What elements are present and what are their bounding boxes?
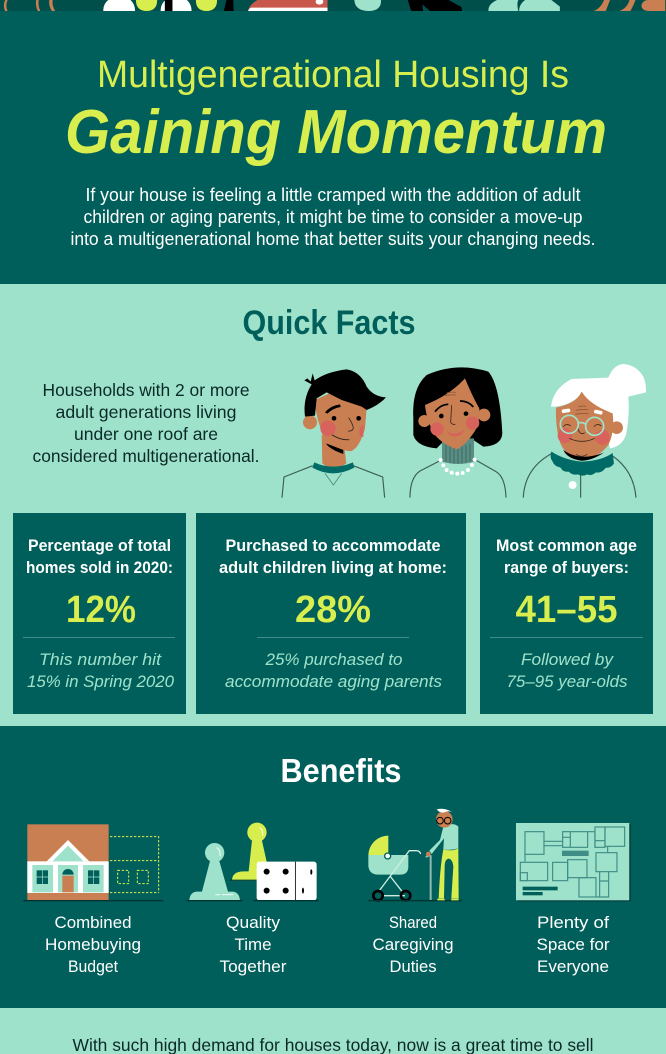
stat card: percentage of homes sold: homes sold in 2020: (26, 559, 173, 577)
stat card: most common age range: 75–95 year-olds (506, 672, 628, 691)
stat card: percentage of homes sold: This number hit (39, 650, 162, 669)
icon: game pieces and domino (187, 823, 319, 901)
stat card: percentage of homes sold (13, 513, 186, 714)
label: Quality (226, 913, 280, 932)
intro paragraph: If your house is feeling a little cramped with the addition of adult (86, 185, 580, 205)
icon: grandfather with stroller (368, 809, 462, 901)
young man (282, 369, 386, 498)
label: Duties (390, 957, 436, 976)
label: Caregiving (372, 935, 454, 954)
stat card: purchased for adult children (196, 513, 466, 714)
label: Budget (68, 957, 118, 976)
definition text: under one roof are (74, 424, 218, 444)
panel: quick facts (0, 284, 666, 726)
definition text (32, 380, 260, 466)
middle-aged woman (410, 367, 506, 498)
panel: closing message (0, 1008, 666, 1054)
definition text: Households with 2 or more (42, 380, 250, 400)
label: Together (220, 957, 287, 976)
title line 2: Gaining Momentum (65, 98, 607, 167)
stat card: most common age range (480, 513, 653, 714)
label: Combined (54, 913, 132, 932)
icon: floor plan (516, 823, 631, 901)
stat card: most common age range: range of buyers: (504, 559, 629, 577)
grandmother (523, 364, 646, 498)
stat card: purchased for adult children: adult children living at home: (219, 559, 447, 577)
benefit: plenty of space (516, 823, 631, 976)
intro paragraph: children or aging parents, it might be time to consider a move-up (84, 207, 582, 227)
intro paragraph: into a multigenerational home that better suits your changing needs. (70, 229, 596, 249)
stat card: most common age range: Most common age (496, 537, 637, 555)
illustration strip: feet along the top edge (0, 0, 666, 11)
benefit: shared caregiving duties (368, 809, 462, 976)
label (45, 913, 141, 976)
stat card: most common age range: Followed by (521, 650, 615, 669)
stat card: purchased for adult children: Purchased to accommodate (226, 537, 440, 555)
icon: house (23, 824, 163, 901)
definition text: adult generations living (56, 402, 236, 422)
header: title and intro (65, 54, 607, 249)
heading: benefits: Benefits (280, 752, 402, 789)
stat card: purchased for adult children: accommodate aging parents (225, 672, 442, 691)
label: Space for (536, 935, 610, 954)
label: Time (234, 935, 272, 954)
label: Shared (389, 913, 437, 932)
label: Everyone (537, 957, 609, 976)
label: Homebuying (45, 935, 141, 954)
definition text: considered multigenerational. (32, 446, 260, 466)
stat card: percentage of homes sold: 12% (66, 589, 136, 631)
label (372, 913, 454, 976)
stat card: most common age range: 41–55 (516, 589, 618, 631)
intro paragraph (70, 185, 596, 249)
label: Plenty of (537, 913, 609, 932)
benefit: combined homebuying budget (23, 824, 163, 976)
stat card: percentage of homes sold: Percentage of total (28, 537, 171, 555)
benefit: quality time together (187, 823, 319, 976)
title line 1: Multigenerational Housing Is (97, 54, 569, 96)
illustration: three generations (282, 364, 646, 498)
heading: quick facts: Quick Facts (242, 304, 416, 342)
panel: benefits (23, 752, 631, 976)
stat card: purchased for adult children: 25% purchased to (265, 650, 402, 669)
stat card: percentage of homes sold: 15% in Spring 2020 (27, 672, 175, 691)
stat card: purchased for adult children: 28% (295, 589, 371, 631)
label (220, 913, 287, 976)
label (536, 913, 610, 976)
